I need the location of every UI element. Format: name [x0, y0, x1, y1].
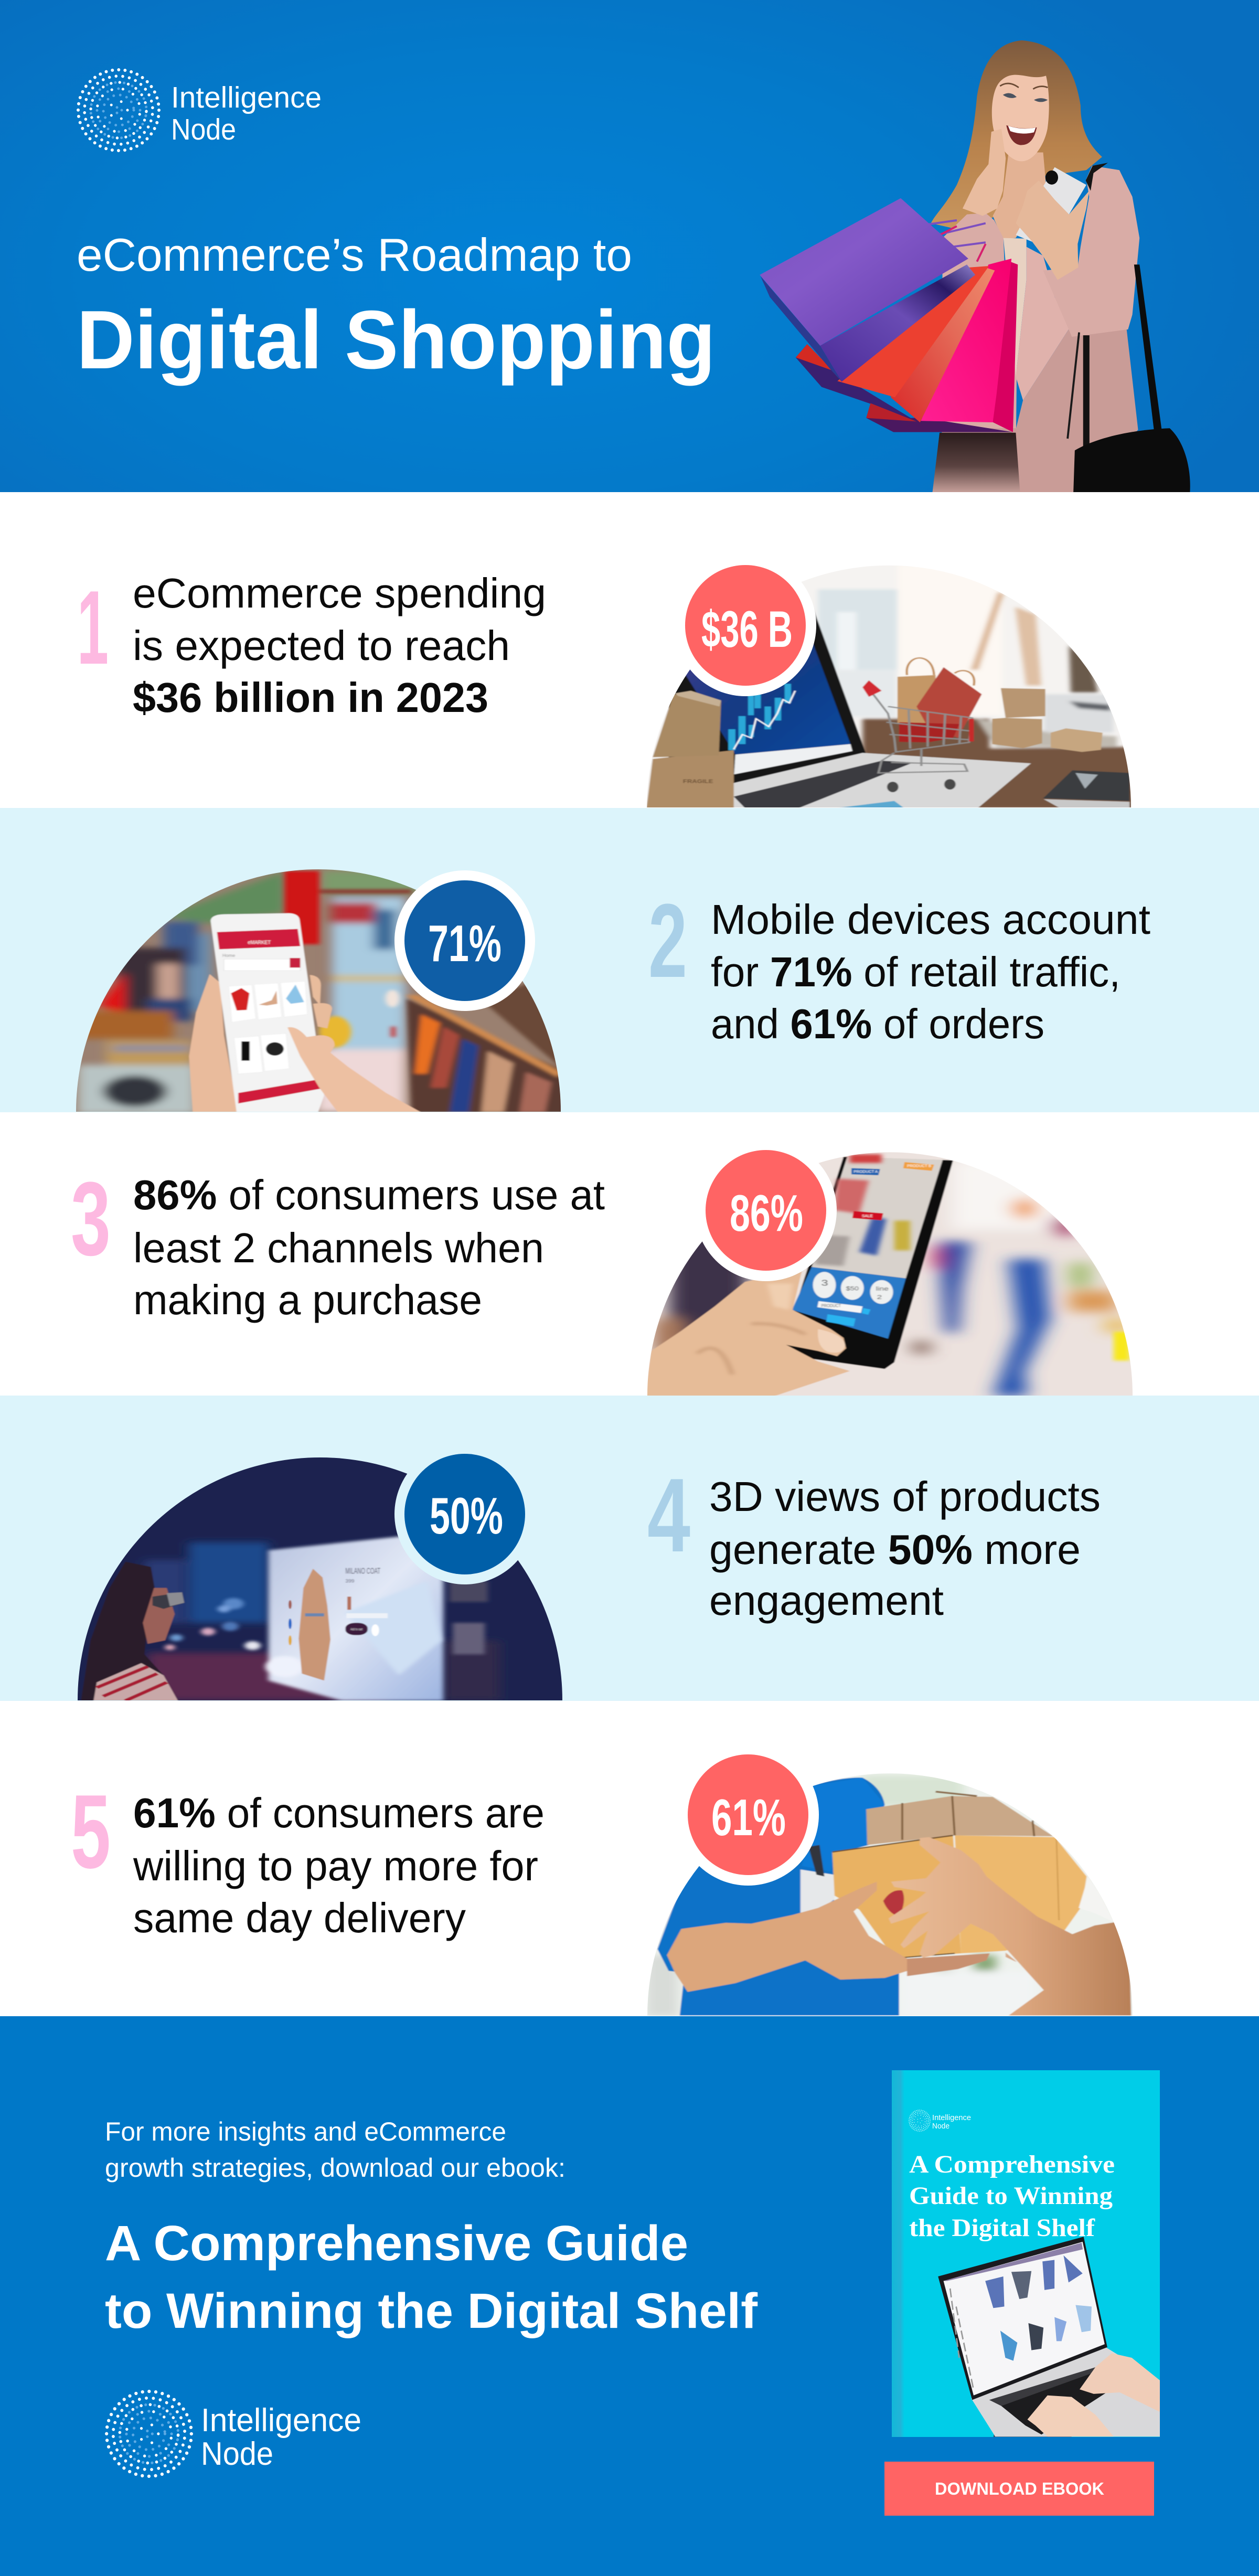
photo: hand holding phone with AR shop overlay: $50	[846, 1285, 859, 1292]
text block: channels: making a purchase	[133, 1276, 482, 1323]
text block: 3D views: 3D views of products	[709, 1473, 1101, 1520]
number 2: 2	[648, 882, 687, 999]
ebook cover	[892, 2070, 1160, 2437]
photo: parcel handover	[640, 1770, 1138, 2016]
logo: Intelligence Node: Intelligence	[171, 81, 322, 114]
panel: stat 2 mobile devices	[0, 808, 1259, 1114]
badge: 61%	[677, 1744, 819, 1886]
ebook cover title: the Digital Shelf	[909, 2214, 1095, 2242]
photo: hand holding phone with AR shop overlay: line	[876, 1285, 889, 1292]
title: Digital Shopping	[77, 294, 716, 386]
badge: 71%: 71%	[428, 914, 502, 972]
text block: intro: For more insights and eCommerce	[105, 2117, 506, 2146]
ebook cover title	[909, 2151, 1115, 2242]
text block: 3D views: generate 50% more	[709, 1526, 1081, 1573]
heading: ebook title: to Winning the Digital Shelf	[105, 2283, 757, 2339]
photo: woman with AR glasses viewing coat: Add to cart	[350, 1627, 362, 1631]
text block: channels: 86% of consumers use at	[133, 1172, 605, 1218]
badge: 50%	[394, 1444, 535, 1584]
badge: 61%: 61%	[711, 1789, 786, 1846]
logo: Intelligence Node footer	[106, 2391, 361, 2476]
photo: hand holding phone with AR shop overlay: 2	[877, 1294, 882, 1301]
photo: hand holding phone with AR shop overlay: PRODUCT B	[907, 1164, 931, 1168]
photo: hand holding phone with AR shop overlay: 3	[821, 1278, 828, 1287]
number 4: 4	[647, 1457, 690, 1574]
photo: hand holding phone in a shop	[68, 867, 567, 1114]
badge: 86%	[695, 1140, 837, 1281]
heading: ebook title	[105, 2216, 757, 2339]
text block: delivery: same day delivery	[133, 1894, 466, 1941]
ebook cover logo: Intelligence	[932, 2113, 971, 2122]
text block: mobile traffic: Mobile devices account	[711, 896, 1150, 943]
photo: hand holding phone with AR shop overlay: PRODUCT A	[853, 1169, 878, 1174]
text block: spending	[133, 570, 546, 721]
photo: woman with AR glasses viewing coat	[68, 1455, 567, 1701]
photo: hand holding phone in a shop: Home	[222, 953, 235, 958]
photo: laptop and mini shopping cart: FRAGILE	[683, 779, 713, 784]
photo: woman with AR glasses viewing coat: MILANO COAT	[345, 1567, 380, 1576]
photo: laptop and mini shopping cart	[640, 563, 1138, 810]
text block: spending: is expected to reach	[133, 622, 510, 669]
ebook cover title: A Comprehensive	[909, 2151, 1115, 2178]
text block: intro: growth strategies, download our ebook:	[105, 2153, 566, 2183]
ebook cover logo: Node	[932, 2122, 949, 2131]
photo: woman with AR glasses viewing coat: 399	[345, 1578, 354, 1584]
photo: hand holding phone with AR shop overlay: SALE	[862, 1214, 873, 1218]
title: eCommerce’s Roadmap to	[77, 229, 632, 281]
panel: stat 1 eCommerce spending	[81, 492, 1190, 807]
text block: channels	[133, 1172, 605, 1323]
number 5: 5	[71, 1773, 111, 1890]
badge: $36 B	[675, 555, 816, 696]
text block: spending: eCommerce spending	[133, 570, 546, 616]
logo: Intelligence Node footer: Intelligence	[201, 2402, 361, 2439]
text block: delivery: 61% of consumers are	[133, 1790, 545, 1836]
text block: 3D views: engagement	[709, 1577, 944, 1624]
text block: mobile traffic	[711, 896, 1150, 1047]
logo: Intelligence Node: Node	[171, 113, 236, 146]
text block: delivery	[133, 1790, 545, 1941]
panel: stat 5 same day delivery	[73, 1754, 1133, 2016]
title	[77, 229, 716, 386]
ebook cover laptop and hands	[938, 2237, 1160, 2437]
badge: $36 B: $36 B	[701, 600, 793, 658]
text block: spending: $36 billion in 2023	[133, 674, 488, 721]
photo: hand holding phone in a shop: eMARKET	[248, 940, 271, 945]
text block: intro	[105, 2117, 566, 2183]
text block: mobile traffic: for 71% of retail traffic,	[711, 949, 1121, 995]
number 1: 1	[77, 569, 109, 686]
badge: 50%: 50%	[430, 1487, 503, 1545]
ebook cover title: Guide to Winning	[909, 2182, 1113, 2210]
badge: 71%	[394, 870, 535, 1011]
text block: channels: least 2 channels when	[133, 1225, 544, 1271]
number 3: 3	[71, 1161, 111, 1278]
text block: delivery: willing to pay more for	[133, 1843, 538, 1889]
text block: 3D views	[709, 1473, 1101, 1624]
panel: stat 4 3D views	[0, 1396, 1259, 1701]
panel: stat 3 channels	[72, 1150, 1133, 1396]
badge: 86%: 86%	[730, 1184, 803, 1242]
text block: mobile traffic: and 61% of orders	[711, 1000, 1044, 1047]
panel: header banner	[0, 0, 1259, 493]
heading: ebook title: A Comprehensive Guide	[105, 2216, 688, 2271]
photo: hand holding phone with AR shop overlay	[640, 1151, 1138, 1397]
logo: Intelligence Node footer: Node	[201, 2436, 273, 2472]
logo: Intelligence Node	[78, 70, 322, 151]
button: download ebook: DOWNLOAD EBOOK	[935, 2479, 1104, 2498]
button: download ebook	[884, 2462, 1154, 2516]
ebook cover logo	[909, 2110, 971, 2131]
photo: hand holding phone with AR shop overlay: PRODUCT	[821, 1304, 841, 1308]
panel: footer call to action	[0, 2016, 1259, 2576]
illustration: woman with shopping bags and phone	[760, 40, 1190, 493]
